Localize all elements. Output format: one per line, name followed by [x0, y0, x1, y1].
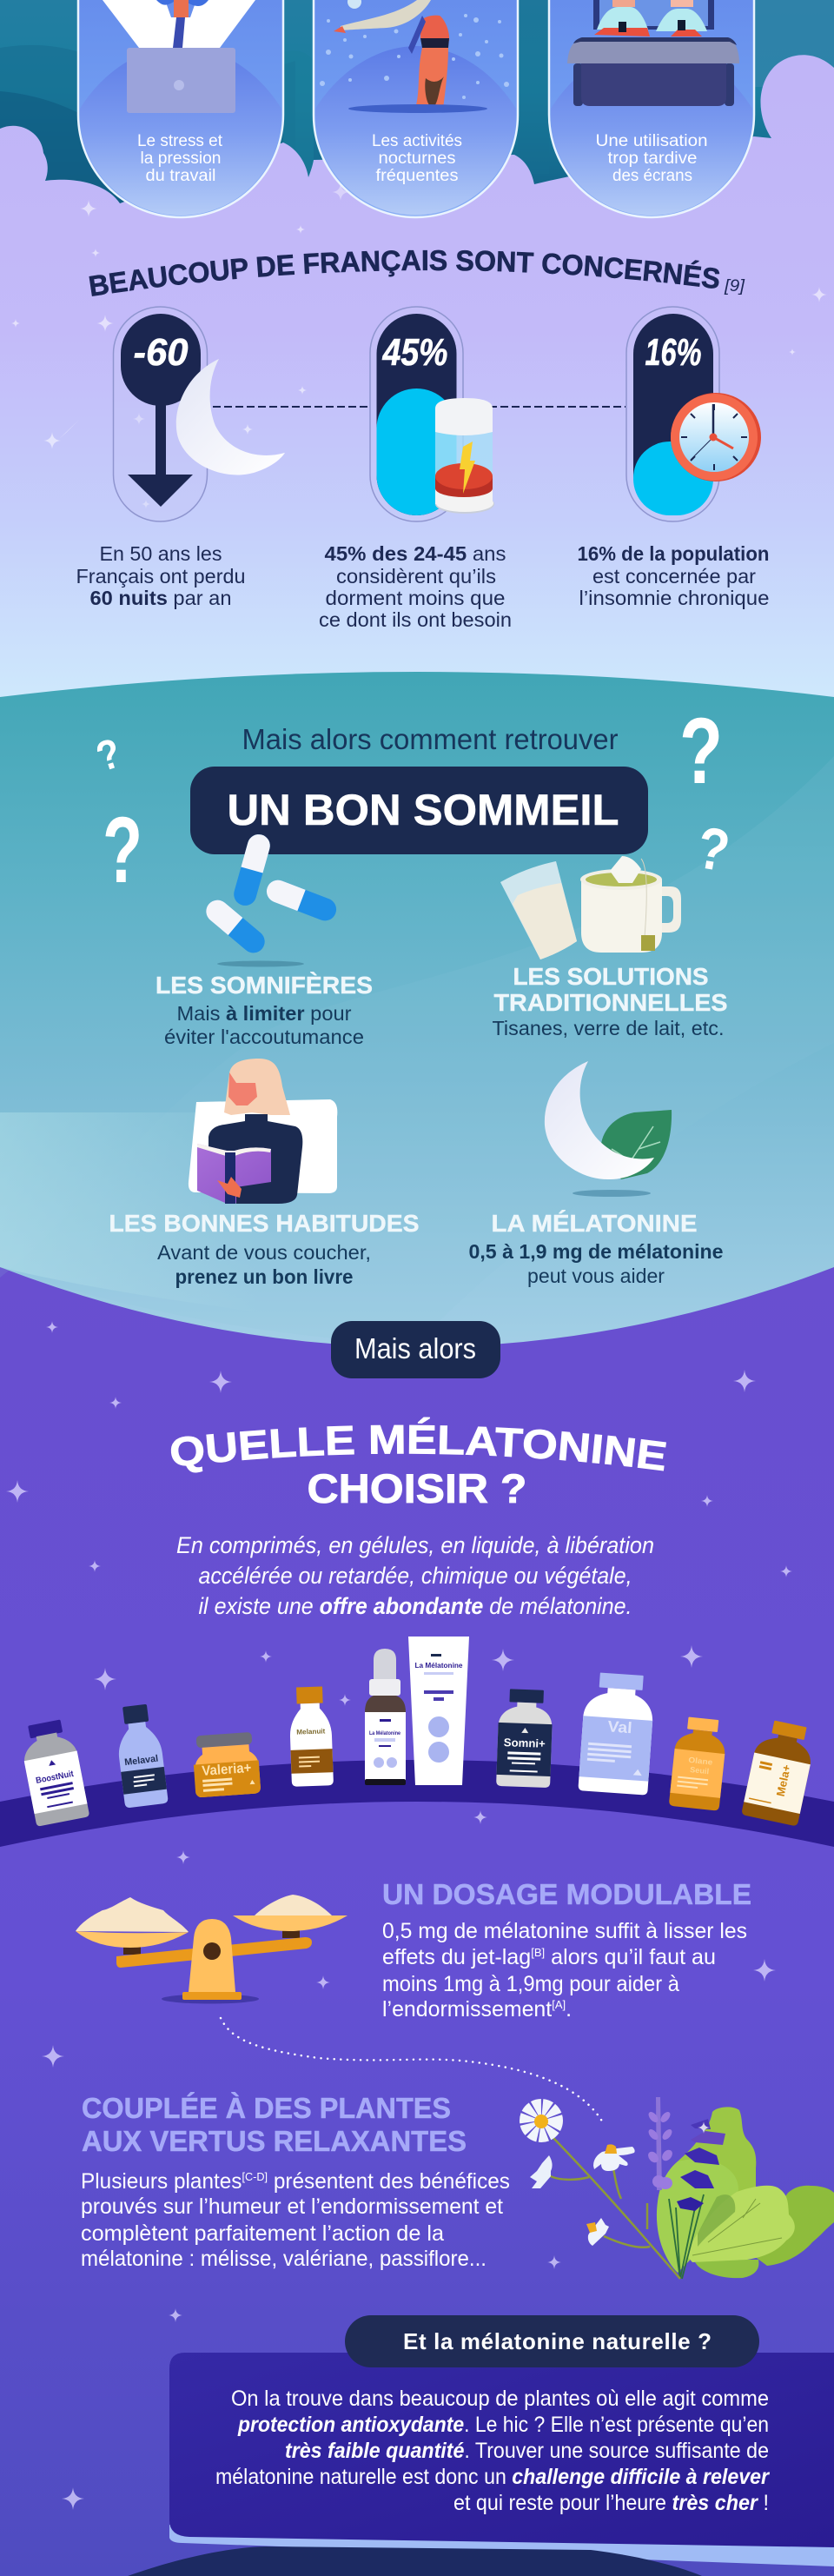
callout text	[215, 2387, 770, 2515]
heading: beaucoup de français sont concernés	[89, 209, 745, 334]
heading: quelle mélatonine choisir: CHOISIR ?	[308, 1465, 526, 1511]
value -60: -60	[134, 331, 189, 374]
title box: un bon sommeil: UN BON SOMMEIL	[228, 786, 619, 834]
box: La Mélatonine	[408, 1637, 469, 1785]
callout text: On la trouve dans beaucoup de plantes où elle agit comme	[231, 2387, 769, 2411]
label	[137, 132, 223, 185]
intro paragraph: accélérée ou retardée, chimique ou végétale,	[198, 1563, 632, 1589]
body text: complètent parfaitement l’action de la	[81, 2221, 444, 2246]
snow dots	[320, 14, 509, 99]
section: couplée à des plantes	[81, 2092, 510, 2271]
body text: [C-D]	[242, 2170, 268, 2183]
callout text: très faible quantité. Trouver une source suffisante de	[285, 2439, 769, 2463]
icon: pill bottle	[435, 398, 494, 514]
capsule	[113, 307, 207, 521]
bottle: Val	[578, 1671, 656, 1796]
label: Le stress et	[137, 132, 223, 150]
item: les somnifères: Mais à limiter pour	[177, 1002, 352, 1025]
icon: arrow down	[128, 400, 193, 507]
body text: .	[566, 1997, 572, 2022]
item: les bonnes habitudes: prenez un bon livre	[175, 1265, 353, 1288]
background: lavender cloud	[0, 55, 834, 730]
bottle: Melaval	[113, 1703, 169, 1809]
callout text: mélatonine naturelle est donc un challenge difficile à relever	[215, 2465, 770, 2489]
body text: Plusieurs plantes	[81, 2169, 246, 2194]
label: fréquentes	[375, 167, 459, 185]
value -60	[121, 314, 201, 406]
bottle: Melanuit: Melanuit	[296, 1727, 326, 1736]
stat text: dorment moins que	[325, 587, 506, 609]
section: un dosage modulable: UN DOSAGE MODULABLE	[382, 1878, 751, 1910]
dropper bottle: La Mélatonine	[365, 1649, 406, 1785]
purple section sparkles	[6, 1321, 792, 2510]
box: La Mélatonine: La Mélatonine	[415, 1662, 463, 1670]
item: les somnifères: éviter l'accoutumance	[164, 1026, 364, 1048]
question marks: ?	[91, 730, 127, 780]
item: les bonnes habitudes: LES BONNES HABITUDES	[109, 1210, 420, 1237]
heading: beaucoup de français sont concernés: BEAUCOUP DE FRANÇAIS SONT CONCERNÉS	[89, 250, 719, 296]
flower: small chamomile low	[586, 2218, 609, 2246]
icon: handstand dancer	[334, 0, 487, 113]
background: night teal waves	[0, 0, 834, 261]
stat text	[319, 542, 512, 631]
bottle: Melanuit	[288, 1686, 334, 1787]
inner arc	[315, 46, 516, 215]
stat text: En 50 ans les	[99, 542, 222, 565]
gauge	[633, 314, 713, 515]
body text: moins 1mg à 1,9mg pour aider à	[382, 1972, 679, 1996]
stat text: est concernée par	[592, 565, 756, 588]
body text: effets du jet-lag	[382, 1945, 530, 1969]
flower: small chamomile left	[530, 2155, 553, 2188]
icon: woman reading a book	[189, 1059, 337, 1204]
icon: man with laptop	[103, 0, 255, 113]
callout text: protection antioxydante. Le hic ? Elle n’est présente qu’en	[237, 2413, 769, 2437]
icon: moon and leaf	[545, 1061, 672, 1197]
callout pill: Et la mélatonine naturelle ?	[403, 2328, 712, 2354]
background: purple section	[0, 1217, 834, 2576]
icon: clock	[671, 393, 761, 481]
callout pill	[345, 2315, 759, 2367]
section: couplée à des plantes: AUX VERTUS RELAXANTES	[82, 2125, 467, 2157]
stat text: considèrent qu’ils	[336, 565, 496, 588]
item: la mélatonine: LA MÉLATONINE	[492, 1210, 697, 1237]
stat text	[76, 542, 245, 609]
bottle: Somni+: Somni+	[504, 1736, 546, 1750]
panel: le stress et la pression du travail	[78, 0, 283, 217]
jar: Valeria+	[192, 1731, 261, 1797]
light edge strip	[169, 2525, 834, 2566]
icon: couple on bed with screens	[567, 0, 739, 106]
question marks: ?	[103, 797, 142, 902]
panel: teal section un bon sommeil	[0, 672, 834, 1347]
value 45%: 45%	[382, 331, 448, 374]
bottle: orange supplement: Olane	[688, 1756, 713, 1767]
body text: 0,5 mg de mélatonine suffit à lisser les	[382, 1919, 747, 1943]
item: la mélatonine: peut vous aider	[527, 1265, 665, 1287]
item: les solutions traditionnelles: LES SOLUTIONS	[513, 963, 709, 990]
label: du travail	[146, 167, 215, 185]
item: les solutions traditionnelles	[492, 963, 728, 1039]
label	[372, 132, 462, 185]
dropper bottle: La Mélatonine: La Mélatonine	[369, 1731, 401, 1736]
heading: beaucoup de français sont concernés: [9]	[724, 277, 745, 295]
pill: mais alors: Mais alors	[354, 1332, 476, 1364]
item: les somnifères: LES SOMNIFÈRES	[156, 972, 373, 999]
label: Les activités	[372, 132, 462, 150]
intro paragraph: il existe une offre abondante de mélatonine.	[198, 1593, 632, 1619]
bottle: Somni+	[496, 1689, 553, 1788]
heading: quelle mélatonine choisir	[170, 1417, 666, 1511]
flower: lavender	[646, 2097, 674, 2190]
stat text: ce dont ils ont besoin	[319, 608, 512, 631]
light wave	[0, 756, 834, 1344]
flower: chamomile	[528, 2108, 554, 2134]
intro paragraph	[176, 1532, 654, 1619]
capsule	[626, 307, 719, 521]
body text: [A]	[552, 1998, 566, 2011]
jar: Valeria+: Valeria+	[202, 1761, 252, 1779]
callout panel	[169, 2353, 834, 2547]
item: les solutions traditionnelles: Tisanes, verre de lait, etc.	[492, 1017, 725, 1039]
stat text: 16% de la population	[577, 542, 770, 565]
bottle: orange supplement: Seuil	[690, 1765, 710, 1776]
icon: sleeping pills	[202, 832, 340, 966]
stat: moins 60 nuits	[76, 307, 285, 609]
products	[17, 1637, 817, 1827]
panel: une utilisation trop tardive des écrans	[549, 0, 754, 217]
section: couplée à des plantes: COUPLÉE À DES PLANTES	[82, 2092, 451, 2124]
icon: crescent moon	[176, 359, 285, 475]
body text: mélatonine : mélisse, valériane, passiflore...	[81, 2247, 486, 2271]
lighter lower-left corner	[0, 1112, 261, 1312]
label: Une utilisation	[596, 132, 707, 150]
heading: mais alors comment retrouver: Mais alors comment retrouver	[242, 723, 619, 755]
stat text	[577, 542, 770, 609]
label	[596, 132, 707, 185]
label: trop tardive	[608, 149, 697, 168]
body text: alors qu’il faut au	[545, 1945, 716, 1969]
bottle: Val: Val	[607, 1717, 632, 1736]
bottle: Mela+: Mela+	[774, 1763, 793, 1797]
body text: [B]	[531, 1946, 545, 1959]
item: les somnifères	[156, 972, 373, 1048]
flower: dark lavender	[677, 2119, 725, 2211]
question marks	[91, 698, 734, 902]
dashed connectors	[213, 406, 626, 408]
bottle: Melaval: Melaval	[124, 1754, 159, 1768]
label: des écrans	[612, 167, 692, 185]
stat text: Français ont perdu	[76, 565, 245, 588]
shelf arc	[0, 1760, 834, 1847]
stat text: l’insomnie chronique	[579, 587, 770, 609]
inner arc	[551, 46, 752, 216]
label: nocturnes	[379, 149, 455, 168]
callout: et la mélatonine naturelle	[169, 2315, 834, 2566]
stat text: 45% des 24-45 ans	[325, 542, 506, 565]
stat text: 60 nuits par an	[90, 587, 231, 609]
body text: l’endormissement	[382, 1997, 553, 2022]
value 16%: 16%	[645, 331, 702, 374]
item: les bonnes habitudes	[109, 1210, 420, 1288]
item: les bonnes habitudes: Avant de vous coucher,	[157, 1241, 371, 1264]
inner arc	[80, 46, 281, 216]
section: un dosage modulable	[382, 1878, 751, 2022]
bottom dark shape	[128, 2546, 702, 2576]
bottle: BoostNuit: BoostNuit	[35, 1769, 75, 1786]
flower: chamomile side	[593, 2144, 635, 2171]
body text: présentent des bénéfices	[268, 2169, 510, 2194]
stat: 16 pour cent	[577, 307, 770, 609]
heading: quelle mélatonine choisir: QUELLE MÉLATONINE	[170, 1417, 666, 1472]
item: la mélatonine	[469, 1210, 723, 1287]
body text	[81, 2169, 510, 2271]
icon: milk glass and herbal tea	[500, 856, 681, 959]
label: la pression	[141, 149, 221, 168]
gauge	[377, 314, 457, 515]
capsule	[370, 307, 463, 521]
panel: les activités nocturnes fréquentes	[314, 0, 518, 217]
bottle: BoostNuit	[17, 1717, 89, 1827]
title box: un bon sommeil	[190, 767, 648, 854]
stat: 45 pour cent	[319, 307, 512, 631]
pill: mais alors	[331, 1321, 500, 1378]
body text: prouvés sur l’humeur et l’endormissement et	[81, 2194, 503, 2219]
question marks: ?	[679, 698, 723, 803]
bottle: orange supplement	[669, 1716, 728, 1811]
icon: balance scale	[76, 1895, 348, 2004]
dotted connector	[221, 2018, 604, 2124]
cloud sparkles	[11, 183, 827, 508]
question marks: ?	[692, 814, 734, 885]
bottle: Mela+	[741, 1717, 817, 1827]
item: la mélatonine: 0,5 à 1,9 mg de mélatonine	[469, 1240, 723, 1263]
body text	[382, 1919, 747, 2022]
callout text: et qui reste pour l’heure très cher !	[453, 2491, 769, 2515]
icon: plants bouquet	[528, 2097, 834, 2279]
intro paragraph: En comprimés, en gélules, en liquide, à libération	[176, 1532, 654, 1558]
item: les solutions traditionnelles: TRADITIONNELLES	[493, 989, 728, 1016]
